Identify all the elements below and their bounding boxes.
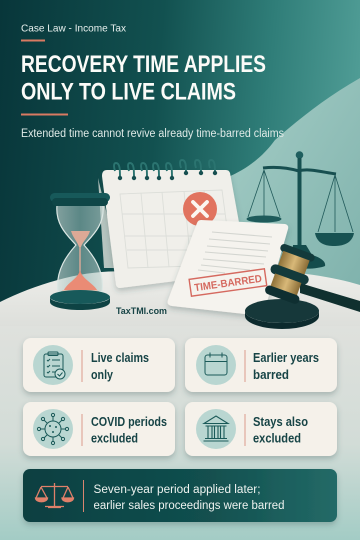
sand <box>71 231 90 247</box>
divider <box>244 350 246 382</box>
card: live claims <box>23 338 175 392</box>
document <box>168 220 288 316</box>
calendar grid <box>120 190 232 268</box>
sound block <box>245 299 319 323</box>
icon: scales <box>36 483 74 508</box>
title: RECOVERY TIME APPLIES <box>21 51 266 78</box>
calendar rings <box>114 160 215 178</box>
banner <box>23 469 337 522</box>
brand label: TaxTMI.com <box>116 306 167 316</box>
divider <box>83 480 84 512</box>
divider <box>244 414 246 446</box>
label: only <box>91 367 114 382</box>
hourglass <box>50 193 110 310</box>
icon: checklist <box>33 345 73 385</box>
divider <box>82 350 83 382</box>
scales of justice <box>246 151 354 269</box>
label: barred <box>253 367 289 382</box>
document lines <box>198 232 272 273</box>
label: Earlier years <box>253 350 319 365</box>
banner text: Seven-year period applied later; <box>94 484 260 496</box>
caps <box>50 193 110 202</box>
label: excluded <box>253 430 301 446</box>
title rule <box>21 114 68 116</box>
label: COVID periods <box>91 414 167 429</box>
icon: court building <box>196 409 236 449</box>
divider <box>82 414 83 446</box>
category label: Case Law - Income Tax <box>21 22 127 34</box>
card: earlier years <box>185 338 337 392</box>
handle <box>300 283 360 312</box>
banner text: earlier sales proceedings were barred <box>94 500 284 512</box>
gavel <box>245 242 360 329</box>
icon: red cross <box>183 192 217 226</box>
stamp: TIME-BARRED <box>194 273 263 294</box>
label: Stays also <box>253 414 308 429</box>
glass <box>57 205 103 292</box>
card: stays <box>185 402 337 456</box>
label: excluded <box>91 430 138 446</box>
icon: calendar <box>196 345 236 385</box>
title: ONLY TO LIVE CLAIMS <box>21 78 236 106</box>
head <box>262 242 318 306</box>
header <box>21 22 284 140</box>
subtitle: Extended time cannot revive already time-barred claims <box>21 128 284 140</box>
calendar <box>98 160 248 288</box>
accent rule <box>21 40 45 42</box>
label: Live claims <box>91 350 149 365</box>
icon: virus <box>33 409 73 449</box>
card: covid periods <box>23 402 175 456</box>
